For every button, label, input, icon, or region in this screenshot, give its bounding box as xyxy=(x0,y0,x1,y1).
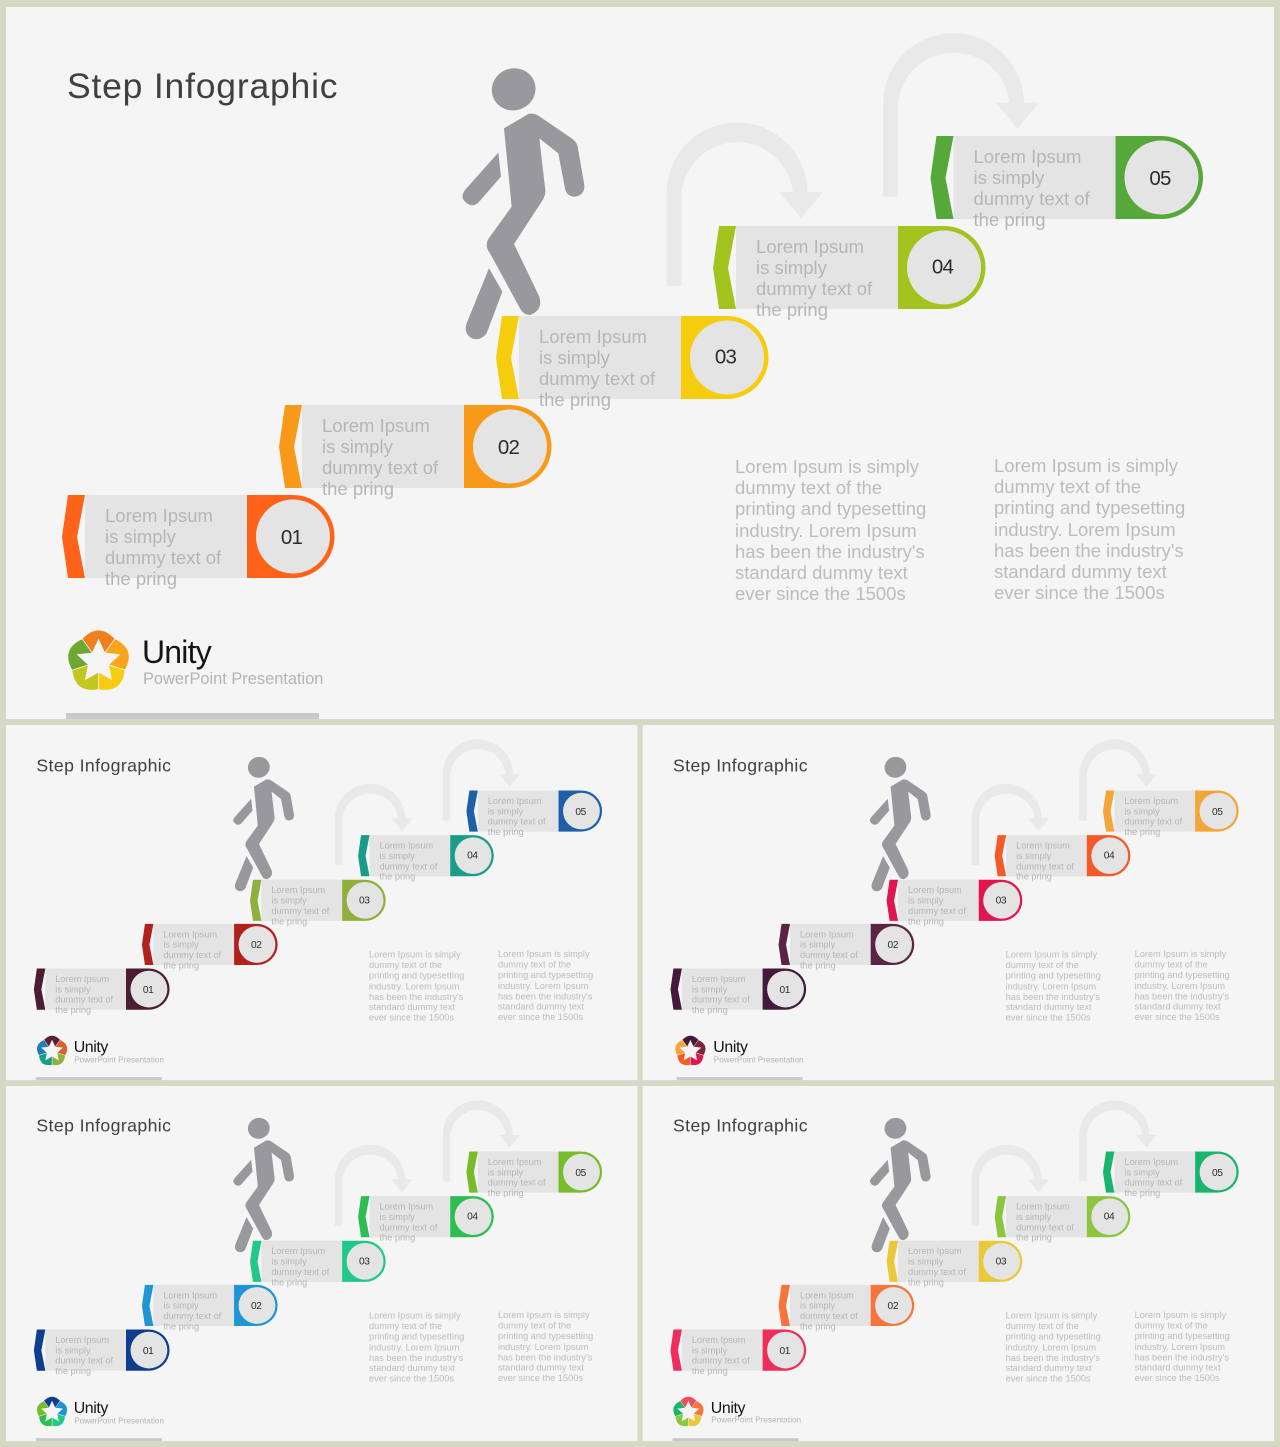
text block: left column: has been the industry's xyxy=(369,1353,464,1363)
step 01: is simply xyxy=(692,1345,728,1355)
text block: left column: printing and typesetting xyxy=(369,970,464,980)
step 02: is simply xyxy=(322,436,394,457)
footer bar xyxy=(672,1438,798,1441)
step 01: Lorem Ipsum xyxy=(692,974,746,984)
text block: left column: printing and typesetting xyxy=(735,498,926,519)
text block: right column: ever since the 1500s xyxy=(498,1012,583,1022)
step 05: Lorem Ipsum xyxy=(974,146,1081,167)
step 05: 05 xyxy=(1212,807,1223,818)
icon: walking person xyxy=(870,1115,931,1252)
text block: left column: printing and typesetting xyxy=(1006,970,1101,980)
step 04: 04 xyxy=(467,851,478,862)
text block: left column: dummy text of the xyxy=(369,960,442,970)
logo wordmark: Unity xyxy=(74,1039,108,1056)
step 03 xyxy=(496,316,768,410)
arrow: step 4 to step 5 xyxy=(1079,739,1157,820)
step 05: Lorem Ipsum xyxy=(1124,796,1178,806)
panel: variant slide bottom left xyxy=(6,1086,637,1441)
step 01 xyxy=(670,1330,806,1376)
text block: right column: printing and typesetting xyxy=(994,497,1185,518)
step 04: dummy text of xyxy=(1016,861,1074,871)
step 02: Lorem Ipsum xyxy=(163,1290,217,1300)
text block: left column: ever since the 1500s xyxy=(369,1013,454,1023)
step 05: the pring xyxy=(1124,1188,1160,1198)
step 01: the pring xyxy=(55,1366,91,1376)
text block: left column: industry. Lorem Ipsum xyxy=(369,981,460,991)
logo wordmark: Unity xyxy=(713,1039,748,1056)
step 02: Lorem Ipsum xyxy=(322,415,430,436)
text block: right column: Lorem Ipsum is simply xyxy=(1135,1310,1227,1320)
text block: right column: dummy text of the xyxy=(994,476,1141,497)
step 02: the pring xyxy=(800,961,836,971)
step 03: 03 xyxy=(359,1256,370,1267)
text block: left column: ever since the 1500s xyxy=(1006,1013,1091,1023)
text block: left column: Lorem Ipsum is simply xyxy=(735,456,920,477)
footer bar xyxy=(66,713,319,719)
step 01: the pring xyxy=(105,568,177,589)
text block: right column: Lorem Ipsum is simply xyxy=(498,949,590,959)
step 03: 03 xyxy=(359,895,370,906)
text block: right column: has been the industry's xyxy=(498,991,593,1001)
step 03: is simply xyxy=(908,1257,944,1267)
panel: main slide xyxy=(6,7,1274,719)
footer bar xyxy=(36,1077,162,1080)
step 05: dummy text of xyxy=(1124,1178,1183,1188)
text block: right column: ever since the 1500s xyxy=(1135,1373,1220,1383)
text block: right column: industry. Lorem Ipsum xyxy=(498,981,589,991)
step 01: is simply xyxy=(55,984,91,994)
step 03: dummy text of xyxy=(908,1267,966,1277)
step 02: the pring xyxy=(163,961,199,971)
step 01: dummy text of xyxy=(55,1356,114,1366)
text block: left column: has been the industry's xyxy=(1006,992,1100,1002)
step 01: 01 xyxy=(779,985,791,996)
arrow: step 4 to step 5 xyxy=(443,739,521,820)
step 04 xyxy=(358,1196,494,1243)
step 05: 05 xyxy=(1212,1168,1223,1179)
logo subtitle: PowerPoint Presentation xyxy=(74,1416,164,1425)
step 05: dummy text of xyxy=(974,188,1091,209)
logo wordmark: Unity xyxy=(142,634,212,670)
step 03 xyxy=(250,880,386,926)
step 01: dummy text of xyxy=(55,995,114,1005)
step 02: 02 xyxy=(251,1301,262,1312)
variant title: Step Infographic xyxy=(36,756,171,776)
text block: right column: has been the industry's xyxy=(1135,991,1229,1001)
step 01 xyxy=(670,969,806,1015)
text block: left column: industry. Lorem Ipsum xyxy=(1006,981,1096,991)
step 04: 04 xyxy=(1104,851,1115,862)
step 03: is simply xyxy=(271,896,307,906)
text block: right column: industry. Lorem Ipsum xyxy=(1135,981,1225,991)
text block: left column: dummy text of the xyxy=(1006,960,1079,970)
text block: right column: dummy text of the xyxy=(1135,960,1208,970)
step 04: is simply xyxy=(1016,851,1052,861)
text block: left column: has been the industry's xyxy=(735,541,925,562)
text block: right column: printing and typesetting xyxy=(1135,1331,1230,1341)
text block: left column: Lorem Ipsum is simply xyxy=(1006,950,1098,960)
icon: walking person xyxy=(870,754,931,891)
step 05: is simply xyxy=(974,167,1045,188)
step 03: Lorem Ipsum xyxy=(271,1246,325,1256)
step 04: the pring xyxy=(379,1233,415,1243)
text block: left column: printing and typesetting xyxy=(1006,1331,1101,1341)
step 04: the pring xyxy=(756,299,828,320)
step 02: 02 xyxy=(498,436,519,459)
variant title: Step Infographic xyxy=(36,1116,171,1136)
icon: walking person xyxy=(233,754,294,891)
arrow: step 4 to step 5 xyxy=(443,1100,521,1181)
panel: variant slide bottom right xyxy=(643,1086,1274,1441)
logo wordmark: Unity xyxy=(74,1400,108,1417)
arrow: step 3 to step 4 xyxy=(666,122,823,286)
step 04: Lorem Ipsum xyxy=(379,841,434,850)
step 02: the pring xyxy=(800,1322,836,1332)
step 01: dummy text of xyxy=(692,1356,750,1366)
text block: right column: dummy text of the xyxy=(498,1321,571,1331)
step 02: dummy text of xyxy=(800,950,858,960)
text block: left column: dummy text of the xyxy=(1006,1321,1079,1331)
logo subtitle: PowerPoint Presentation xyxy=(711,1415,801,1424)
footer bar xyxy=(36,1438,162,1441)
step 05: 05 xyxy=(1149,167,1171,190)
step 02 xyxy=(779,1285,914,1332)
step 03: the pring xyxy=(908,1277,944,1287)
step 05: Lorem Ipsum xyxy=(488,1157,542,1167)
logo wordmark: Unity xyxy=(711,1400,746,1417)
text block: left column: ever since the 1500s xyxy=(1006,1374,1091,1384)
text block: right column: has been the industry's xyxy=(994,540,1184,561)
text block: left column: standard dummy text xyxy=(1006,1363,1092,1373)
step 05: dummy text of xyxy=(488,817,546,827)
text block: left column: has been the industry's xyxy=(369,992,464,1002)
text block: right column: Lorem Ipsum is simply xyxy=(1135,949,1227,959)
step 02 xyxy=(142,924,278,971)
step 05 xyxy=(1103,790,1239,837)
step 04: is simply xyxy=(1016,1212,1052,1222)
step 05: is simply xyxy=(488,1167,524,1177)
text block: left column: Lorem Ipsum is simply xyxy=(369,950,461,960)
step 03: Lorem Ipsum xyxy=(908,1246,962,1256)
step 03: is simply xyxy=(908,896,944,906)
step 03: is simply xyxy=(271,1257,307,1267)
step 01: is simply xyxy=(55,1345,91,1355)
step 03: the pring xyxy=(539,389,611,410)
text block: left column: dummy text of the xyxy=(369,1321,442,1331)
step 02: dummy text of xyxy=(163,950,222,960)
step 03 xyxy=(887,1241,1022,1287)
step 01: the pring xyxy=(692,1005,728,1015)
step 05: is simply xyxy=(1124,806,1160,816)
text block: right column: Lorem Ipsum is simply xyxy=(498,1310,590,1320)
icon: logo star xyxy=(673,1035,708,1069)
text block: left column: ever since the 1500s xyxy=(735,583,906,604)
step 01 xyxy=(62,495,334,589)
text block: left column: standard dummy text xyxy=(735,562,908,583)
step 01: 01 xyxy=(143,1346,154,1357)
logo subtitle: PowerPoint Presentation xyxy=(74,1055,164,1064)
step 05 xyxy=(1103,1151,1239,1198)
step 04: is simply xyxy=(379,851,415,861)
step 02: 02 xyxy=(888,1301,899,1312)
step 04: 04 xyxy=(932,256,953,278)
step 03: 03 xyxy=(715,346,736,368)
step 05: dummy text of xyxy=(1124,817,1183,827)
step 03: Lorem Ipsum xyxy=(271,885,325,895)
variant title: Step Infographic xyxy=(673,1116,808,1136)
step 02: 02 xyxy=(251,940,262,951)
step 03: dummy text of xyxy=(908,906,966,916)
text block: right column: printing and typesetting xyxy=(498,1331,593,1341)
step 04: Lorem Ipsum xyxy=(379,1202,434,1211)
text block: right column: standard dummy text xyxy=(498,1002,584,1012)
step 03 xyxy=(887,880,1022,926)
step 04: the pring xyxy=(1016,872,1052,882)
text block: right column: ever since the 1500s xyxy=(1135,1012,1220,1022)
text block: left column: Lorem Ipsum is simply xyxy=(369,1311,461,1321)
step 02: dummy text of xyxy=(800,1311,858,1321)
step 03: the pring xyxy=(271,916,307,926)
text block: right column: printing and typesetting xyxy=(498,970,593,980)
step 05: is simply xyxy=(488,806,524,816)
step 01: 01 xyxy=(281,526,302,549)
step 01: the pring xyxy=(55,1005,91,1015)
footer bar xyxy=(676,1077,802,1080)
step 01: 01 xyxy=(143,985,154,996)
step 04: dummy text of xyxy=(756,278,873,299)
step 01: is simply xyxy=(105,526,177,547)
text block: right column: has been the industry's xyxy=(1135,1352,1229,1362)
text block: right column: has been the industry's xyxy=(498,1352,593,1362)
step 03: 03 xyxy=(996,1256,1007,1267)
arrow: step 3 to step 4 xyxy=(972,784,1049,865)
arrow: step 4 to step 5 xyxy=(883,33,1040,196)
step 05 xyxy=(466,1151,602,1198)
text block: right column: standard dummy text xyxy=(498,1363,584,1373)
step 01 xyxy=(34,1330,170,1376)
step 05: the pring xyxy=(488,827,524,837)
step 04: 04 xyxy=(467,1212,478,1223)
text block: right column: dummy text of the xyxy=(1135,1321,1208,1331)
text block: right column: standard dummy text xyxy=(1135,1363,1221,1373)
step 04: the pring xyxy=(379,872,415,882)
main slide background xyxy=(6,7,1274,719)
text block: right column: printing and typesetting xyxy=(1135,970,1230,980)
step 01: Lorem Ipsum xyxy=(692,1335,746,1345)
text block: left column: standard dummy text xyxy=(369,1363,455,1373)
step 05: the pring xyxy=(1124,827,1160,837)
step 05: 05 xyxy=(575,1168,587,1179)
step 02 xyxy=(779,924,914,971)
step 04 xyxy=(713,226,986,320)
step 01: Lorem Ipsum xyxy=(55,1335,109,1345)
text block: right column: industry. Lorem Ipsum xyxy=(994,519,1176,540)
step 02: Lorem Ipsum xyxy=(163,929,217,939)
text block: left column: Lorem Ipsum is simply xyxy=(1006,1311,1098,1321)
text block: left column: has been the industry's xyxy=(1006,1353,1100,1363)
step 02: 02 xyxy=(888,940,899,951)
step 04: dummy text of xyxy=(1016,1222,1074,1232)
variant background xyxy=(6,1086,637,1441)
step 03: Lorem Ipsum xyxy=(539,326,647,347)
step 03 xyxy=(250,1241,386,1287)
step 05: Lorem Ipsum xyxy=(488,796,542,806)
arrow: step 3 to step 4 xyxy=(972,1145,1049,1226)
arrow: step 3 to step 4 xyxy=(335,1145,413,1226)
step 04: is simply xyxy=(379,1212,415,1222)
step 03: dummy text of xyxy=(271,906,330,916)
title: Step Infographic xyxy=(67,66,338,106)
icon: walking person xyxy=(462,62,584,339)
step 04: Lorem Ipsum xyxy=(1016,1202,1070,1211)
step 02: the pring xyxy=(163,1322,199,1332)
step 03: dummy text of xyxy=(271,1267,330,1277)
step 03: dummy text of xyxy=(539,368,656,389)
variant background xyxy=(643,1086,1274,1441)
text block: left column: standard dummy text xyxy=(1006,1002,1092,1012)
icon: walking person xyxy=(233,1115,294,1252)
icon: logo star xyxy=(35,1396,70,1430)
step 04: dummy text of xyxy=(379,861,438,871)
text block: left column: printing and typesetting xyxy=(369,1331,464,1341)
step 01: Lorem Ipsum xyxy=(105,505,213,526)
text block: right column: ever since the 1500s xyxy=(994,582,1165,603)
panel: variant slide top right xyxy=(643,725,1274,1080)
step 03: the pring xyxy=(271,1277,307,1287)
step 02: dummy text of xyxy=(163,1311,222,1321)
step 05: Lorem Ipsum xyxy=(1124,1157,1178,1167)
text block: right column: standard dummy text xyxy=(1135,1002,1221,1012)
step 05: is simply xyxy=(1124,1167,1160,1177)
step 05: 05 xyxy=(575,807,587,818)
step 01 xyxy=(34,969,170,1015)
step 04 xyxy=(995,1196,1130,1243)
step 02: is simply xyxy=(800,1301,836,1311)
text block: left column: ever since the 1500s xyxy=(369,1374,454,1384)
text block: right column: industry. Lorem Ipsum xyxy=(498,1342,589,1352)
step 02: the pring xyxy=(322,478,394,499)
text block: right column: Lorem Ipsum is simply xyxy=(994,455,1179,476)
step 02: Lorem Ipsum xyxy=(800,1290,854,1300)
step 03: the pring xyxy=(908,916,944,926)
text block: left column: standard dummy text xyxy=(369,1002,455,1012)
step 01: dummy text of xyxy=(692,995,750,1005)
arrow: step 4 to step 5 xyxy=(1079,1100,1157,1181)
step 01: is simply xyxy=(692,984,728,994)
step 01: 01 xyxy=(779,1346,791,1357)
text block: right column: standard dummy text xyxy=(994,561,1167,582)
step 01: Lorem Ipsum xyxy=(55,974,109,984)
text block: left column: industry. Lorem Ipsum xyxy=(735,520,917,541)
step 04: Lorem Ipsum xyxy=(756,236,864,257)
step 02 xyxy=(142,1285,278,1332)
step 05 xyxy=(466,790,602,837)
variant background xyxy=(643,725,1274,1080)
text block: left column: dummy text of the xyxy=(735,477,882,498)
text block: right column: ever since the 1500s xyxy=(498,1373,583,1383)
step 05: the pring xyxy=(974,209,1046,230)
panel: variant slide top left xyxy=(6,725,637,1080)
icon: logo star xyxy=(671,1396,706,1430)
step 03: Lorem Ipsum xyxy=(908,885,962,895)
step 04 xyxy=(995,835,1130,882)
icon: logo star xyxy=(63,630,134,697)
step 02: is simply xyxy=(163,940,199,950)
step 04: 04 xyxy=(1104,1212,1115,1223)
step 04: the pring xyxy=(1016,1233,1052,1243)
step 03: 03 xyxy=(996,895,1007,906)
step 02: is simply xyxy=(800,940,836,950)
logo subtitle: PowerPoint Presentation xyxy=(143,670,323,688)
text block: right column: industry. Lorem Ipsum xyxy=(1135,1342,1225,1352)
step 04: is simply xyxy=(756,257,828,278)
logo subtitle: PowerPoint Presentation xyxy=(714,1055,804,1064)
variant title: Step Infographic xyxy=(673,756,808,776)
step 05 xyxy=(930,136,1203,230)
step 05: the pring xyxy=(488,1188,524,1198)
step 02: is simply xyxy=(163,1301,199,1311)
step 02: dummy text of xyxy=(322,457,439,478)
step 04: dummy text of xyxy=(379,1222,438,1232)
step 01: the pring xyxy=(692,1366,728,1376)
text block: right column: dummy text of the xyxy=(498,960,571,970)
text block: left column: industry. Lorem Ipsum xyxy=(369,1342,460,1352)
step 03: is simply xyxy=(539,347,611,368)
step 02: Lorem Ipsum xyxy=(800,929,854,939)
variant background xyxy=(6,725,637,1080)
step 05: dummy text of xyxy=(488,1178,546,1188)
step 02 xyxy=(279,405,552,499)
text block: left column: industry. Lorem Ipsum xyxy=(1006,1342,1096,1352)
step 04: Lorem Ipsum xyxy=(1016,841,1070,850)
step 01: dummy text of xyxy=(105,547,222,568)
icon: logo star xyxy=(35,1035,70,1069)
arrow: step 3 to step 4 xyxy=(335,784,413,865)
step 04 xyxy=(358,835,494,882)
